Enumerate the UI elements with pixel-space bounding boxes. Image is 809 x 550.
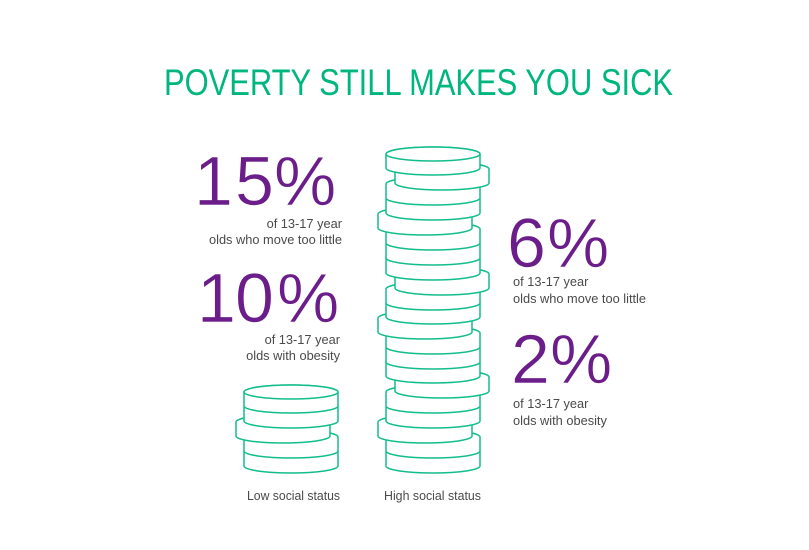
label: low social status: Low social status <box>247 488 340 503</box>
title: POVERTY STILL MAKES YOU SICK <box>164 62 673 103</box>
coin stack: high social status <box>378 147 489 473</box>
stat: 10% low status, obesity: 10% <box>197 259 339 337</box>
stat: 6% high status, moves too little: 6% <box>507 204 609 282</box>
stat: 15% low status, moves too little: 15% <box>194 142 336 220</box>
stat: 10% low status, obesity: of 13-17 year <box>265 332 341 347</box>
stat: 15% low status, moves too little: olds who move too little <box>209 232 342 247</box>
stat: 2% high status, obesity: olds with obesity <box>513 413 607 428</box>
stat: 6% high status, moves too little: of 13-17 year <box>513 274 589 289</box>
stat: 10% low status, obesity: olds with obesity <box>246 348 341 363</box>
coin stack: low social status <box>236 385 338 473</box>
stat: 6% high status, moves too little <box>507 204 646 306</box>
stat: 2% high status, obesity: of 13-17 year <box>513 396 589 411</box>
stat: 6% high status, moves too little: olds who move too little <box>513 291 646 306</box>
label: high social status: High social status <box>384 488 481 503</box>
stat: 2% high status, obesity: 2% <box>511 320 612 398</box>
stat: 15% low status, moves too little: of 13-17 year <box>267 216 343 231</box>
